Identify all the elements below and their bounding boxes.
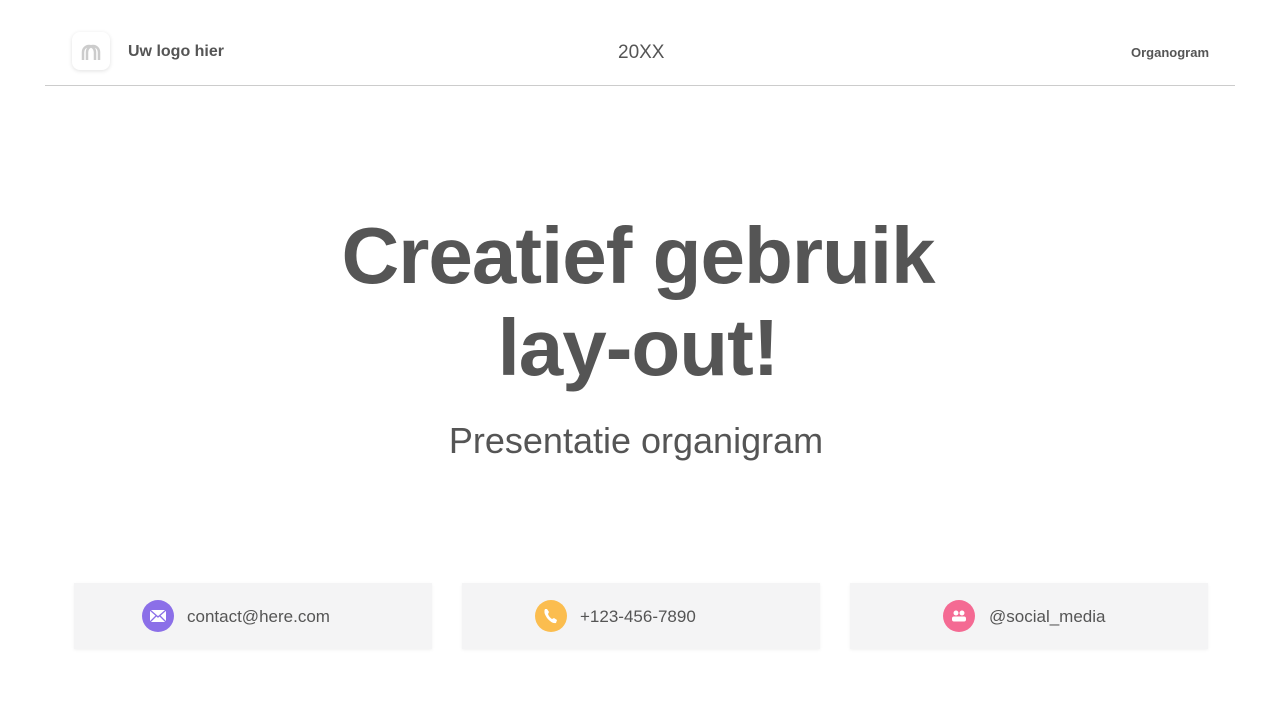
- icon: social: [943, 600, 975, 632]
- title: [341, 211, 936, 392]
- title: lay-out!: [498, 303, 778, 392]
- logo text: Uw logo hier: [128, 43, 224, 60]
- nav label: Organogram: [1131, 45, 1209, 60]
- contact card: social: @social_media: [989, 607, 1105, 626]
- logo icon: [72, 32, 110, 70]
- contact card: email: [74, 583, 432, 649]
- title: Creatief gebruik: [341, 211, 935, 300]
- contact card: phone: +123-456-7890: [580, 607, 696, 626]
- year: 20XX: [618, 42, 664, 63]
- icon: email: [142, 600, 174, 632]
- icon: phone: [535, 600, 567, 632]
- contact card: email: contact@here.com: [187, 607, 330, 626]
- contact card: phone: [462, 583, 820, 649]
- header: [45, 30, 1235, 86]
- subtitle: Presentatie organigram: [449, 420, 823, 461]
- contact card: social: [850, 583, 1208, 649]
